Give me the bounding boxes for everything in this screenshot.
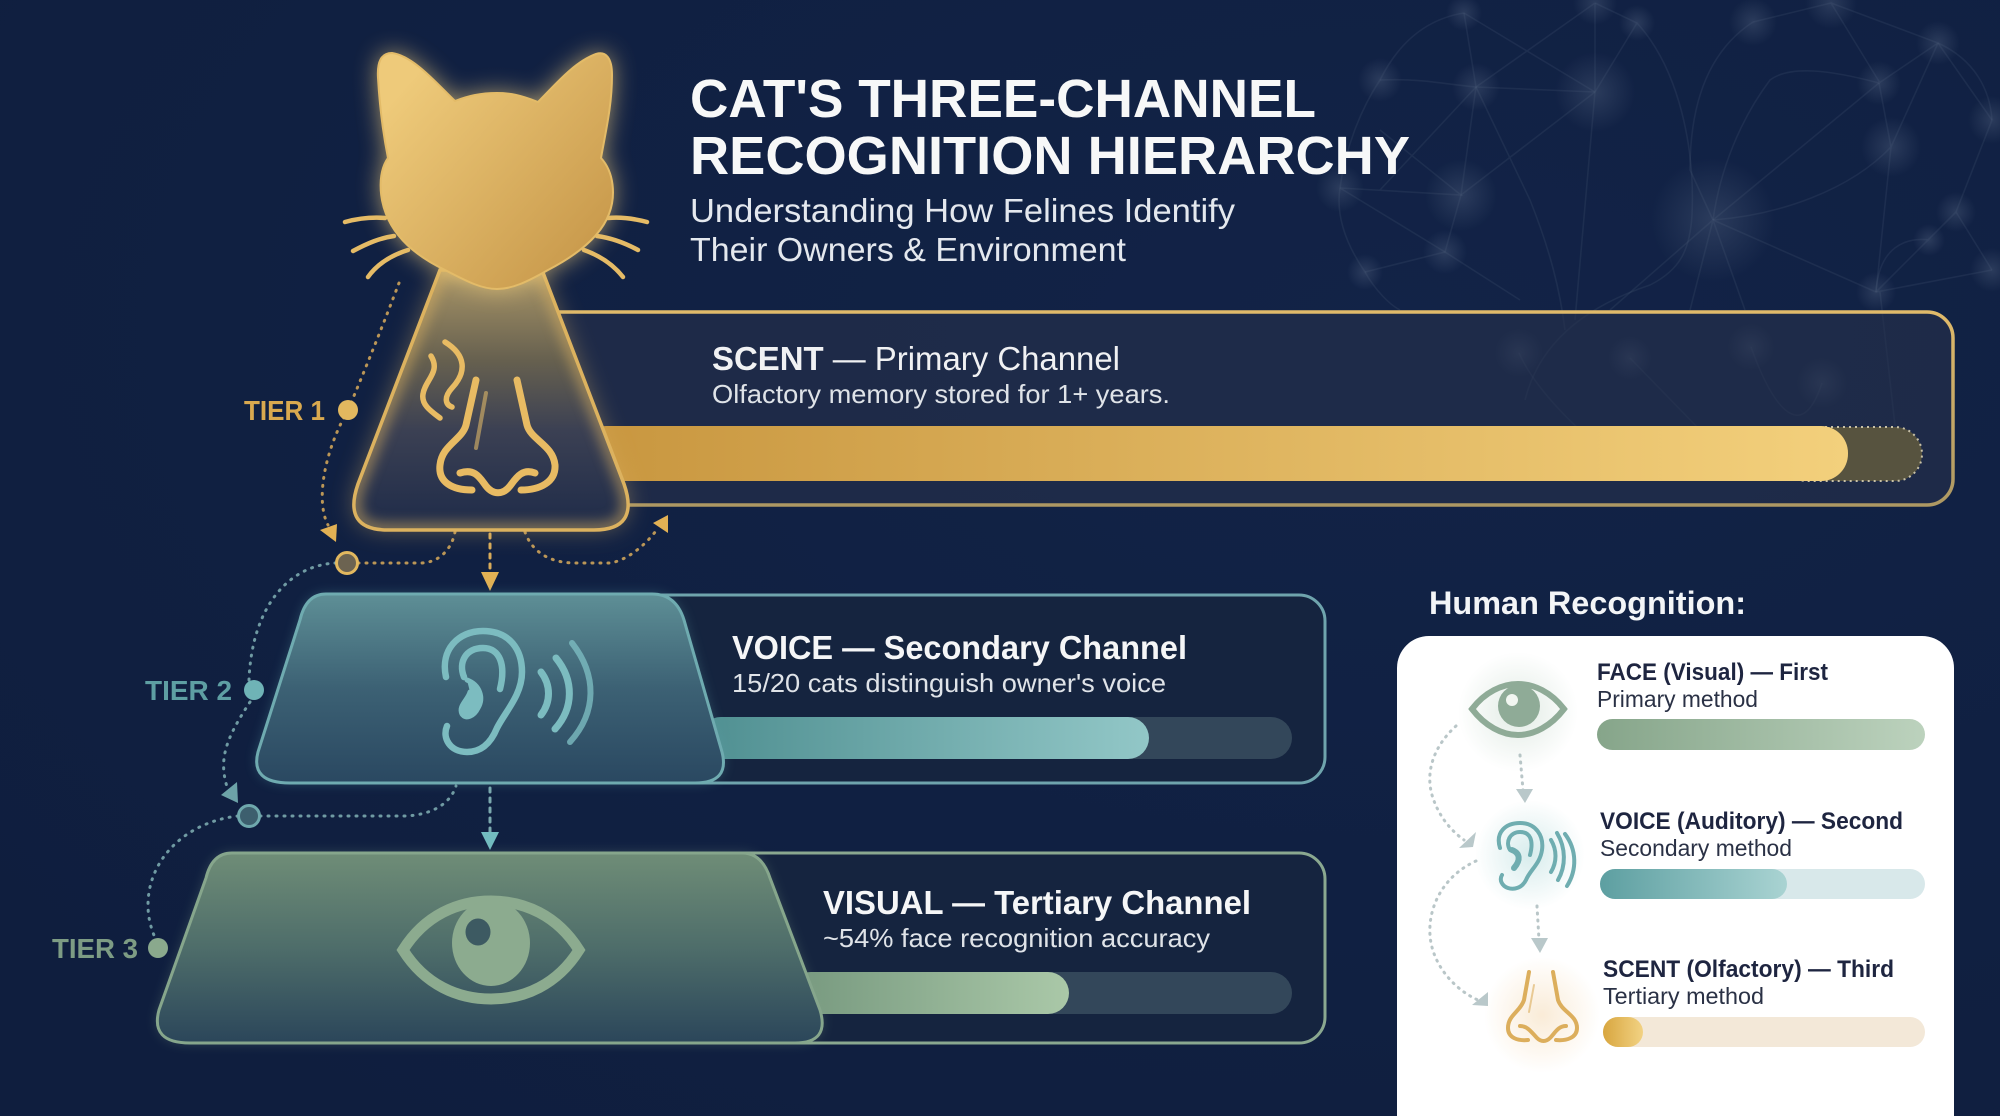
row: face: FACE (Visual) — First <box>1597 659 1828 686</box>
subtitle: Understanding How Felines Identify <box>690 192 1236 229</box>
human flow arrows <box>1430 726 1539 1000</box>
tier nodes <box>52 395 358 964</box>
node: tier 2: TIER 2 <box>145 675 232 706</box>
title: CAT'S THREE-CHANNEL <box>690 69 1316 129</box>
visual panel frame <box>700 853 1325 1043</box>
panel: human recognition card <box>1397 636 1954 1116</box>
visual bar track <box>790 972 1292 1014</box>
row: voice <box>1475 800 1925 910</box>
scent panel frame <box>500 312 1953 505</box>
visual bar fill <box>790 972 1069 1014</box>
visual heading: VISUAL — Tertiary Channel <box>823 884 1251 921</box>
subtitle: Their Owners & Environment <box>690 231 1126 268</box>
voice panel frame <box>560 595 1325 783</box>
visual description: ~54% face recognition accuracy <box>823 923 1210 953</box>
panel: visual channel <box>700 853 1325 1043</box>
voice bar track <box>700 717 1292 759</box>
subtitle <box>690 192 1236 268</box>
tier connector arrows <box>148 283 658 938</box>
row: face <box>1458 652 1925 772</box>
arrowheads <box>221 515 668 850</box>
title: RECOGNITION HIERARCHY <box>690 126 1410 186</box>
node: tier 3: TIER 3 <box>52 933 138 964</box>
panel: voice channel <box>560 595 1325 783</box>
junction ring teal <box>238 806 260 826</box>
icon: small nose <box>1508 972 1577 1041</box>
row: voice: Secondary method <box>1600 835 1792 861</box>
row: face: Primary method <box>1597 686 1758 712</box>
junction ring gold <box>336 552 358 574</box>
neural network background pattern <box>1316 0 2000 480</box>
cat head icon <box>345 53 647 289</box>
row: voice: VOICE (Auditory) — Second <box>1600 808 1903 835</box>
icon: ear <box>445 631 522 752</box>
panel: scent tier cone <box>354 270 628 530</box>
node: tier 1: TIER 1 <box>244 395 325 426</box>
icon: nose <box>440 380 555 493</box>
row: scent: SCENT (Olfactory) — Third <box>1603 956 1894 983</box>
human recognition heading: Human Recognition: <box>1429 585 1746 621</box>
icon: eye <box>403 900 579 999</box>
scent bar track <box>1780 427 1922 481</box>
icon: small eye <box>1472 684 1564 735</box>
panel: voice tier trapezoid <box>257 594 723 783</box>
title <box>690 69 1410 186</box>
icon: sound waves <box>541 643 591 742</box>
scent description: Olfactory memory stored for 1+ years. <box>712 379 1170 409</box>
row: scent: Tertiary method <box>1603 983 1764 1009</box>
icon: small ear <box>1499 823 1574 889</box>
icon: scent waves <box>423 342 462 418</box>
panel: scent channel <box>500 312 1953 505</box>
scent bar fill <box>580 426 1848 481</box>
voice heading: VOICE — Secondary Channel <box>732 629 1187 666</box>
row: scent <box>1484 956 1925 1073</box>
whiskers <box>345 218 647 277</box>
panel: visual tier trapezoid <box>157 853 822 1043</box>
voice bar fill <box>700 717 1149 759</box>
scent heading: SCENT — Primary Channel <box>712 340 1120 377</box>
voice description: 15/20 cats distinguish owner's voice <box>732 668 1166 698</box>
